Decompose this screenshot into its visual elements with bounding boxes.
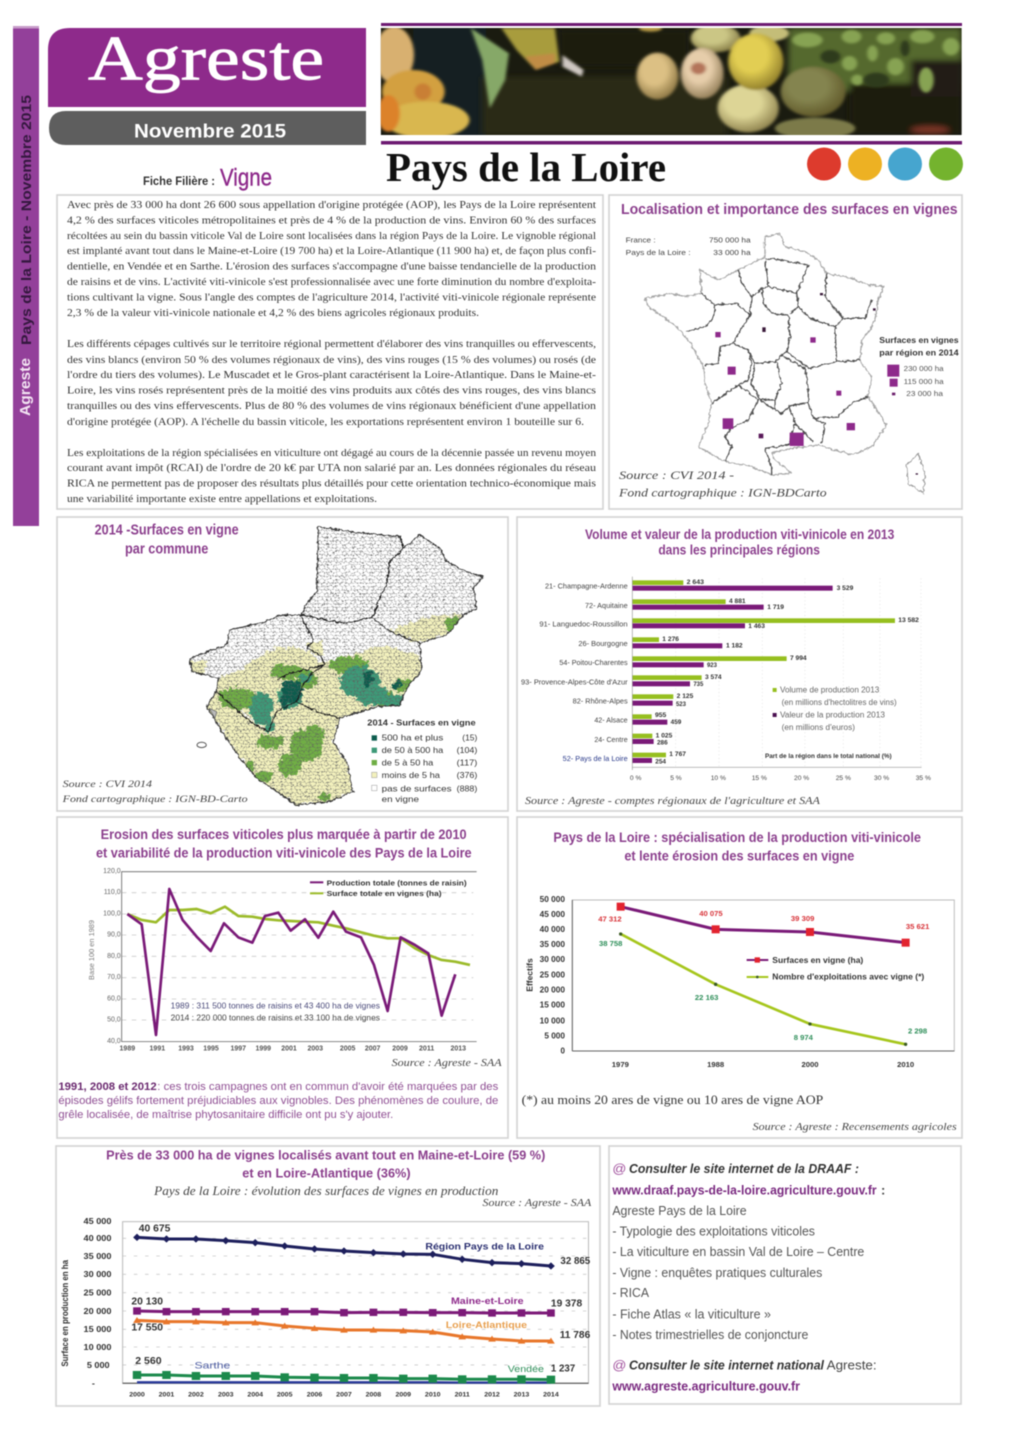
value labels: 1 463 xyxy=(748,623,765,630)
side band label: Agreste: Agreste xyxy=(18,358,34,416)
value labels: 1 719 xyxy=(767,604,784,611)
y axis title: Surface en production en ha xyxy=(60,1260,70,1367)
series labels: Vendée xyxy=(508,1364,544,1374)
publication list: Agreste Pays de la Loire xyxy=(612,1203,747,1218)
paragraph 2: tranquilles ou des vins effervescents. Plus de 80 % des volumes de vins régionaux bénéficient d'une appellation xyxy=(67,400,597,412)
paragraph 1: Avec près de 33 000 ha dont 26 600 sous appellation d'origine protégée (AOP), les Pays de la Loire représentent xyxy=(67,199,596,211)
value labels: 523 xyxy=(676,701,686,708)
heading: et en Loire-Atlantique (36%) xyxy=(242,1166,411,1181)
commentary: grêle localisée, de maîtrise phytosanitaire difficile ont pu s'y ajouter. xyxy=(58,1109,393,1121)
data labels: 1 237 xyxy=(551,1364,576,1375)
x axis labels: 2007 xyxy=(365,1045,381,1052)
national totals: France : xyxy=(626,235,656,244)
series labels: Sarthe xyxy=(195,1361,230,1371)
series labels: Maine-et-Loire xyxy=(451,1296,524,1306)
header: date box: Novembre 2015 xyxy=(134,122,286,142)
chart note xyxy=(171,1001,380,1023)
y axis labels: 25 000 xyxy=(84,1288,111,1298)
paragraph 3: RICA ne permettent pas de proposer des résultats plus détaillés pour cette orientation technico-économique mais xyxy=(67,478,596,490)
surface squares xyxy=(715,293,918,475)
bars xyxy=(632,577,922,770)
grapes xyxy=(374,24,855,139)
y axis labels: 30 000 xyxy=(84,1269,111,1279)
region labels: 91- Languedoc-Roussillon xyxy=(539,619,628,628)
chart note: 2014 : 220 000 tonnes de raisins et 33 100 ha de vignes xyxy=(171,1013,380,1023)
x axis labels: 10 % xyxy=(711,775,726,782)
paragraph 1: de raisins et de vins. L'activité viti-vinicole s'est professionnalisée avec une forte diminution du nombre d'exploita- xyxy=(67,276,596,288)
heading xyxy=(95,523,239,557)
heading xyxy=(96,826,472,861)
x axis labels: 2000 xyxy=(129,1392,145,1398)
value labels: 1 182 xyxy=(726,642,743,649)
value labels: 286 xyxy=(657,739,668,746)
paragraph 3 xyxy=(67,447,597,505)
source: Fond cartographique : IGN-BD-Carto xyxy=(61,794,248,805)
y axis labels: 70,0 xyxy=(107,974,121,981)
line chart xyxy=(122,872,477,1042)
y axis labels: 10 000 xyxy=(540,1016,566,1025)
source: Source : Agreste - SAA xyxy=(392,1058,502,1069)
x axis labels: 2013 xyxy=(451,1045,466,1052)
header: Agreste logo box xyxy=(48,22,366,107)
line chart xyxy=(572,900,954,1051)
source: Source : CVI 2014 - xyxy=(619,468,734,482)
x axis labels: 2001 xyxy=(159,1392,174,1398)
y axis labels: 45 000 xyxy=(84,1216,111,1226)
paragraph 2: des vins blancs (environ 50 % des volumes régionaux de vins), des vins rouges (15 % des volumes) ou rosés (de xyxy=(67,354,596,366)
legend xyxy=(879,335,959,398)
value labels: 1 276 xyxy=(662,636,679,643)
y axis labels: 40 000 xyxy=(540,925,566,934)
x axis labels: 2010 xyxy=(425,1392,441,1398)
data labels: 2 560 xyxy=(135,1356,162,1367)
y axis labels: 50 000 xyxy=(540,895,566,904)
commentary: épisodes gélifs fortement préjudiciables aux vignobles. Des phénomènes de coulure, de xyxy=(58,1095,498,1107)
publication list: - Fiche Atlas « la viticulture » xyxy=(612,1306,771,1321)
x axis labels: 1988 xyxy=(707,1060,725,1069)
DRAAF link heading: www.draaf.pays-de-la-loire.agriculture.gouv.fr xyxy=(611,1182,877,1197)
x axis labels: 2008 xyxy=(366,1392,381,1398)
icon: coloured dots xyxy=(807,148,963,180)
region labels: 93- Provence-Alpes-Côte d'Azur xyxy=(521,677,628,686)
y axis labels xyxy=(103,868,121,1045)
data labels: 19 378 xyxy=(551,1299,583,1310)
value labels: exploitations: 22 163 xyxy=(695,993,718,1002)
value labels: 3 529 xyxy=(837,585,854,592)
national totals: Pays de la Loire : xyxy=(626,248,691,257)
y axis labels: 25 000 xyxy=(540,970,566,979)
photo: grapes xyxy=(374,24,962,139)
heading: et lente érosion des surfaces en vigne xyxy=(624,848,855,863)
value labels: 254 xyxy=(655,758,666,765)
x axis labels: 20 % xyxy=(794,775,809,782)
publication list: - Typologie des exploitations viticoles xyxy=(612,1223,815,1238)
value labels: exploitations: 2 298 xyxy=(908,1026,928,1035)
publication list: - La viticulture en bassin Val de Loire – Centre xyxy=(612,1244,864,1259)
y axis labels: 10 000 xyxy=(84,1342,111,1352)
legend: Surface totale en vignes (ha) xyxy=(327,889,442,898)
source: Source : CVI 2014 xyxy=(63,779,152,790)
legend: Nombre d'exploitations avec vigne (*) xyxy=(772,972,925,981)
value labels: exploitations: 8 974 xyxy=(794,1033,814,1042)
heading: et variabilité de la production viti-vinicole des Pays de la Loire xyxy=(96,845,472,861)
line chart xyxy=(123,1222,588,1383)
x axis labels: 15 % xyxy=(752,775,767,782)
subtitle: fiche filière xyxy=(143,164,272,192)
x axis labels: 2004 xyxy=(247,1392,263,1398)
y axis labels: - xyxy=(92,1378,95,1388)
header: purple rule top xyxy=(381,23,962,26)
heading: 2014 -Surfaces en vigne xyxy=(95,523,239,539)
y axis labels: 120,0 xyxy=(103,868,121,875)
legend: (376) xyxy=(457,770,477,780)
x axis labels: 2009 xyxy=(395,1392,411,1398)
y axis labels: 40 000 xyxy=(84,1233,111,1243)
legend xyxy=(765,685,897,760)
paragraph 2: Loire, les vins rosés représentent près de la moitié des vins produits aux côtés des vins rouges, des vins blancs xyxy=(67,384,596,396)
value labels: 955 xyxy=(655,712,667,719)
value labels: surfaces: 35 621 xyxy=(906,922,930,931)
panel: introduction text xyxy=(57,195,603,509)
paragraph 3: courant avant impôt (RCAI) de l'ordre de 20 k€ par UTA non salarié par an. Les données régionales du réseau xyxy=(67,462,597,474)
header: date box xyxy=(49,111,366,145)
value labels: 923 xyxy=(707,662,717,669)
legend: 23 000 ha xyxy=(906,389,944,398)
x axis labels: 2006 xyxy=(307,1392,322,1398)
national link: Agreste: xyxy=(827,1357,877,1372)
region labels: 82- Rhône-Alpes xyxy=(573,696,628,705)
paragraph 1: 4,2 % des surfaces viticoles métropolitaines et près de 4 % de la production de vins. Environ 60 % des surfaces xyxy=(67,214,596,226)
paragraph 2: d'origine protégée (AOP). A l'échelle du bassin viticole, les exportations représentent environ 1 bouteille sur 6. xyxy=(67,416,584,428)
region labels: 21- Champagne-Ardenne xyxy=(545,581,628,590)
commentary xyxy=(58,1081,498,1121)
y axis labels xyxy=(84,1216,111,1388)
y axis title: Effectifs xyxy=(525,958,534,992)
y axis labels: 30 000 xyxy=(540,955,566,964)
legend xyxy=(747,956,925,981)
value labels: 13 582 xyxy=(898,617,919,624)
legend: (104) xyxy=(457,745,477,755)
x axis labels: 2000 xyxy=(801,1060,818,1069)
source: Source : Agreste - SAA xyxy=(483,1198,592,1209)
panel: websites xyxy=(609,1146,961,1404)
region labels: 42- Alsace xyxy=(594,715,628,724)
publication list: - Vigne : enquêtes pratiques culturales xyxy=(612,1265,823,1280)
national totals: 750 000 ha xyxy=(709,235,751,244)
commentary: : ces trois campagnes ont en commun d'avoir été marquées par des xyxy=(157,1081,498,1093)
region labels xyxy=(521,581,628,763)
region labels: 54- Poitou-Charentes xyxy=(559,658,628,667)
legend: Valeur de la production 2013 xyxy=(780,710,886,719)
y axis labels: 5 000 xyxy=(544,1031,566,1040)
legend: par région en 2014 xyxy=(879,348,959,358)
chart note: 1989 : 311 500 tonnes de raisins et 43 400 ha de vignes xyxy=(171,1001,380,1011)
department boundaries xyxy=(190,527,483,805)
y axis labels: 35 000 xyxy=(84,1251,111,1261)
y axis labels: 40,0 xyxy=(107,1038,121,1045)
side band label: region and date: Pays de la Loire - Novembre 2015 xyxy=(18,95,34,345)
value labels: 3 574 xyxy=(705,674,722,681)
legend: (en millions d'hectolitres de vins) xyxy=(782,698,897,707)
legend xyxy=(310,878,467,898)
y axis labels: 15 000 xyxy=(84,1324,111,1334)
DRAAF link heading xyxy=(611,1161,885,1197)
series labels xyxy=(195,1242,544,1374)
subtitle: Pays de la Loire : évolution des surfaces de vignes en production xyxy=(153,1184,498,1198)
panel: specialisation line chart xyxy=(517,817,962,1138)
region labels: 52- Pays de la Loire xyxy=(563,754,628,763)
foliage highlights xyxy=(792,30,959,93)
region labels: 26- Bourgogne xyxy=(578,639,628,648)
heading xyxy=(553,830,921,863)
data labels: 17 550 xyxy=(131,1323,163,1334)
x axis labels: 2009 xyxy=(392,1045,408,1052)
legend: Surfaces en vignes xyxy=(879,335,959,345)
national link: www.agreste.agriculture.gouv.fr xyxy=(611,1378,800,1393)
series labels: Loire-Atlantique xyxy=(446,1320,527,1330)
legend: Production totale (tonnes de raisin) xyxy=(327,878,467,887)
y axis labels: 60,0 xyxy=(107,995,121,1002)
value labels: surfaces: 40 075 xyxy=(699,909,723,918)
legend: Surfaces en vigne (ha) xyxy=(772,956,864,965)
y axis labels: 15 000 xyxy=(540,1000,566,1009)
x axis labels: 2001 xyxy=(281,1045,297,1052)
paragraph 1: 2,3 % de la valeur viti-vinicole nationale et 4,2 % des biens agricoles régionaux produits. xyxy=(67,307,479,319)
region labels: 72- Aquitaine xyxy=(585,601,628,610)
y axis labels: 0 xyxy=(561,1046,566,1055)
publication list xyxy=(612,1203,864,1342)
x axis labels: 2013 xyxy=(514,1392,529,1398)
heading: Pays de la Loire : spécialisation de la production viti-vinicole xyxy=(553,830,921,845)
y axis labels: 20 000 xyxy=(84,1306,111,1316)
y axis labels xyxy=(540,895,566,1055)
y axis labels: 90,0 xyxy=(107,931,121,938)
legend: moins de 5 ha xyxy=(382,770,440,780)
value labels: surfaces: 47 312 xyxy=(598,914,622,923)
publication list: - Notes trimestrielles de conjoncture xyxy=(612,1327,808,1342)
legend: pas de surfaces xyxy=(382,783,452,793)
x axis labels xyxy=(129,1392,559,1398)
source xyxy=(618,468,827,499)
x axis labels: 2010 xyxy=(897,1060,914,1069)
heading xyxy=(585,527,895,557)
DRAAF link heading: : xyxy=(881,1182,885,1197)
y axis labels: 35 000 xyxy=(540,940,566,949)
legend: (888) xyxy=(457,783,477,793)
x axis labels: 25 % xyxy=(836,775,851,782)
heading: Près de 33 000 ha de vignes localisés avant tout en Maine-et-Loire (59 %) xyxy=(106,1148,545,1162)
heading: Volume et valeur de la production viti-vinicole en 2013 xyxy=(585,527,895,542)
map of France regions xyxy=(645,233,925,493)
subtitle: fiche filière: Fiche Filière : xyxy=(143,174,215,188)
x axis labels: 1991 xyxy=(150,1045,165,1052)
region labels: 24- Centre xyxy=(594,735,628,744)
legend: 115 000 ha xyxy=(904,377,945,386)
commentary: 1991, 2008 et 2012 xyxy=(58,1081,157,1093)
map of Pays de la Loire communes xyxy=(183,522,490,812)
y axis labels: 45 000 xyxy=(540,910,566,919)
heading: par commune xyxy=(125,541,208,557)
x axis labels: 2011 xyxy=(419,1045,434,1052)
source: Source : Agreste - comptes régionaux de l'agriculture et SAA xyxy=(525,796,821,807)
x axis labels: 2005 xyxy=(277,1392,293,1398)
value labels: 1 025 xyxy=(656,732,673,739)
value labels: 735 xyxy=(693,681,704,688)
national totals: 33 000 ha xyxy=(713,248,751,257)
value labels: 4 881 xyxy=(729,598,746,605)
national link xyxy=(611,1357,877,1393)
value labels: exploitations: 38 758 xyxy=(599,939,623,948)
x axis labels: 0 % xyxy=(630,775,641,782)
publication list: - RICA xyxy=(612,1285,649,1300)
heading: dans les principales régions xyxy=(658,542,820,557)
title: Pays de la Loire xyxy=(386,144,666,190)
DRAAF link heading: Consulter le site internet de la DRAAF : xyxy=(629,1161,859,1176)
x axis labels: 1993 xyxy=(178,1045,194,1052)
data labels: 20 130 xyxy=(131,1297,163,1308)
paragraph 1: dentielle, en Vendée et en Sarthe. L'érosion des surfaces s'accompagne d'une baisse tendancielle de la production xyxy=(67,260,597,272)
side band xyxy=(13,26,39,526)
x axis labels: 1989 xyxy=(120,1045,135,1052)
DRAAF link heading: @ xyxy=(612,1161,626,1176)
data labels xyxy=(131,1224,591,1375)
x axis labels: 2002 xyxy=(188,1392,204,1398)
national link: Consulter le site internet national xyxy=(629,1357,824,1372)
paragraph 3: une variabilité importante existe entre appellations et exploitations. xyxy=(67,493,377,505)
paragraph 2: Les différents cépages cultivés sur le territoire régional permettent d'élaborer des vins tranquilles ou effervescents, xyxy=(67,338,596,350)
y axis labels: 110,0 xyxy=(104,889,121,896)
legend: de 50 à 500 ha xyxy=(382,745,443,755)
y axis labels: 100,0 xyxy=(103,910,121,917)
source xyxy=(61,779,248,805)
national totals xyxy=(626,235,751,257)
header: purple rule bottom xyxy=(381,141,962,144)
x axis labels: 2012 xyxy=(484,1392,500,1398)
legend: (en millions d'euros) xyxy=(782,723,855,732)
series labels: Région Pays de la Loire xyxy=(425,1242,544,1252)
value labels: 2 125 xyxy=(677,693,694,700)
x axis labels: 30 % xyxy=(874,775,889,782)
x axis labels xyxy=(630,775,931,782)
legend: de 5 à 50 ha xyxy=(382,757,433,767)
x axis labels: 1995 xyxy=(203,1045,219,1052)
value labels: exploitations xyxy=(599,939,928,1042)
x axis labels: 2011 xyxy=(455,1392,470,1398)
paragraph 1: est implanté avant tout dans le Maine-et-Loire (19 700 ha) et la Loire-Atlantique (11 900 ha) et, de façon plus confi- xyxy=(67,245,596,257)
legend: (15) xyxy=(462,733,477,743)
panel: surfaces by department line chart xyxy=(56,1146,600,1406)
value labels: 2 643 xyxy=(687,579,704,586)
y axis labels: 5 000 xyxy=(87,1360,110,1370)
x axis labels xyxy=(612,1060,914,1069)
y axis labels: 50,0 xyxy=(107,1016,121,1023)
heading: Localisation et importance des surfaces en vignes xyxy=(621,202,958,218)
leaves xyxy=(471,28,584,108)
heading xyxy=(106,1148,545,1181)
legend: 500 ha et plus xyxy=(382,733,444,743)
x axis labels: 35 % xyxy=(916,775,931,782)
panel: erosion line chart xyxy=(57,817,508,1138)
legend: en vigne xyxy=(382,794,419,804)
legend: Volume de production 2013 xyxy=(780,685,880,694)
paragraph 3: Les exploitations de la région spécialisées en viticulture ont dégagé au cours de la décennie passée un revenu moyen xyxy=(67,447,597,459)
value labels: surfaces xyxy=(598,909,930,931)
x axis labels: 2003 xyxy=(308,1045,323,1052)
paragraph 2 xyxy=(67,338,597,428)
paragraph 1 xyxy=(67,199,597,319)
paragraph 1: tions cultivant la vigne. Sous l'angle des comptes de l'agriculture 2014, l'activité viti-vinicole régionale représente xyxy=(67,292,596,304)
footnote: (*) au moins 20 ares de vigne ou 10 ares de vigne AOP xyxy=(522,1093,823,1107)
y axis labels: 80,0 xyxy=(107,953,121,960)
panel: France map xyxy=(609,195,962,509)
subtitle: fiche filière: Vigne xyxy=(220,164,272,192)
panel: volume and value bar chart xyxy=(517,517,962,811)
x axis labels: 2014 xyxy=(543,1392,559,1398)
value labels: 1 767 xyxy=(669,751,686,758)
national link: @ xyxy=(612,1357,626,1372)
legend: 2014 - Surfaces en vigne xyxy=(367,717,476,727)
header: Agreste logo box: Agreste xyxy=(88,22,324,94)
paragraph 1: récoltées au sein du bassin viticole Val de Loire sont localisées dans la région Pays de la Loire. Le vignoble régional xyxy=(67,230,596,242)
x axis labels: 1999 xyxy=(256,1045,271,1052)
value labels: surfaces: 39 309 xyxy=(791,914,814,923)
source: Fond cartographique : IGN-BDCarto xyxy=(618,485,827,499)
y axis title: Base 100 en 1989 xyxy=(89,920,96,980)
x axis labels: 2005 xyxy=(340,1045,356,1052)
x axis labels: 2003 xyxy=(218,1392,234,1398)
value labels: 7 994 xyxy=(790,655,807,662)
source: Source : Agreste : Recensements agricoles xyxy=(753,1122,957,1133)
data labels: 32 865 xyxy=(560,1256,591,1267)
legend: 230 000 ha xyxy=(904,364,945,373)
data labels: 40 675 xyxy=(139,1224,171,1234)
heading: Erosion des surfaces viticoles plus marquée à partir de 2010 xyxy=(101,826,467,842)
panel: vineyard surfaces per commune map xyxy=(57,517,508,812)
x axis labels xyxy=(120,1045,466,1052)
legend xyxy=(367,717,477,804)
value labels xyxy=(655,579,919,765)
x axis labels: 1997 xyxy=(231,1045,246,1052)
legend: (117) xyxy=(457,757,477,767)
x axis labels: 5 % xyxy=(670,775,682,782)
value labels: 459 xyxy=(671,719,682,726)
legend: Part de la région dans le total national (%) xyxy=(765,753,892,760)
x axis labels: 1979 xyxy=(612,1060,629,1069)
x axis labels: 2007 xyxy=(336,1392,352,1398)
data labels: 11 786 xyxy=(560,1330,591,1341)
y axis labels: 20 000 xyxy=(540,985,566,994)
paragraph 2: l'ordre du tiers des volumes). Le Muscadet et le Gros-plant caractérisent la Loire-Atlantique. Dans le Maine-et- xyxy=(67,369,596,381)
